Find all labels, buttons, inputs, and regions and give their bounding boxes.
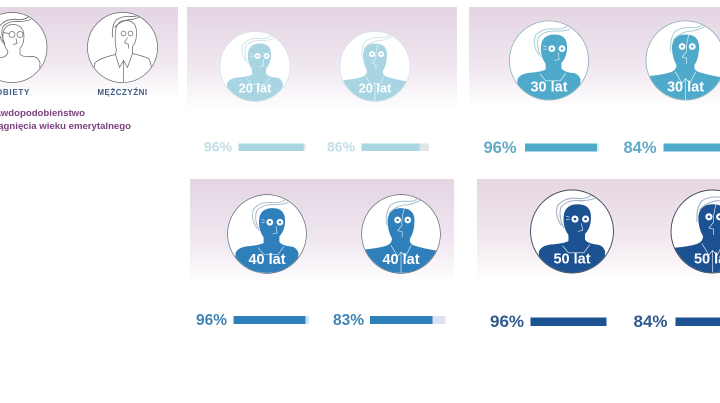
stat: women 96%: 96%	[204, 138, 233, 154]
portrait: man 30	[643, 21, 720, 106]
portrait: woman 50: 50 lat	[553, 252, 591, 268]
portrait: woman 30	[509, 21, 589, 106]
legend description	[0, 108, 131, 132]
portrait: woman 30: 30 lat	[530, 80, 568, 96]
stat: women 96%	[490, 312, 606, 331]
stat: women 96%: 96%	[490, 312, 524, 331]
portrait: man 20	[337, 32, 410, 106]
stat: men 84%: 84%	[634, 312, 668, 331]
portrait: man 30: 30 lat	[667, 80, 704, 96]
stat: men 84%	[634, 312, 720, 331]
panel: age 50	[477, 179, 720, 331]
stat: women 96%	[484, 139, 599, 157]
icon: woman outline	[0, 12, 47, 88]
panel: age 30	[469, 7, 720, 157]
portrait: woman 40	[228, 195, 306, 279]
stat: men 86%: 86%	[327, 138, 356, 154]
panel: age 20	[187, 7, 457, 154]
stat: women 96%: 96%	[196, 312, 227, 329]
stat: women 96%: 96%	[484, 139, 517, 157]
portrait: woman 50	[531, 190, 613, 279]
stat: men 86%	[327, 138, 429, 154]
portrait: man 40: 40 lat	[382, 252, 420, 268]
icon: man outline	[88, 12, 158, 88]
panel: legend	[0, 7, 178, 132]
stat: women 96%	[204, 138, 306, 154]
stat: men 83%: 83%	[333, 312, 364, 329]
stat: men 84%	[624, 139, 720, 157]
portrait: man 40	[358, 195, 440, 279]
portrait: man 20: 20 lat	[359, 80, 392, 96]
portrait: woman 20	[220, 32, 290, 106]
label: men: MĘŻCZYŹNI	[97, 88, 148, 97]
panel: age 40	[190, 179, 454, 329]
portrait: woman 40: 40 lat	[248, 252, 286, 268]
stat: women 96%	[196, 312, 309, 329]
stat: men 84%: 84%	[624, 139, 657, 157]
portrait: man 50	[670, 190, 720, 274]
stat: men 83%	[333, 312, 446, 329]
portrait: woman 20: 20 lat	[239, 80, 272, 96]
